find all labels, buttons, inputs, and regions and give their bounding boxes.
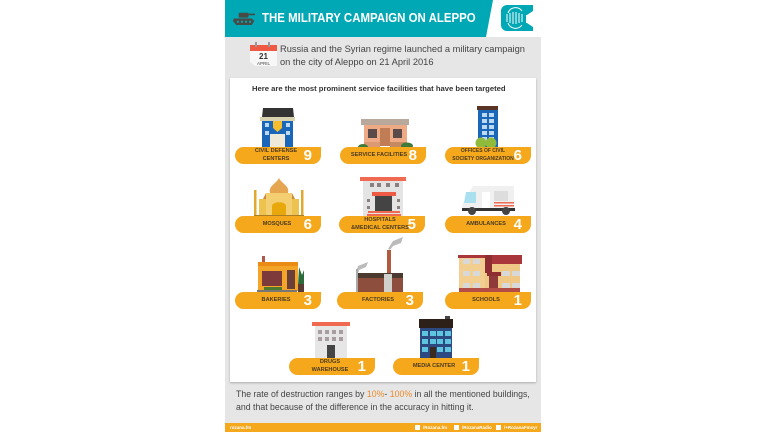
icon: calendar 21 April: 21 — [259, 52, 268, 61]
label: civil defense centers 9: CENTERS — [263, 156, 289, 162]
footer website: rozana.fm — [230, 425, 251, 430]
icon: factory — [356, 237, 403, 292]
footer social links: /+RozanaFmsyr — [504, 425, 537, 430]
card heading: Here are the most prominent service facilities that have been targeted — [252, 84, 506, 93]
intro text: Russia and the Syrian regime launched a military campaign — [280, 44, 525, 54]
label: ambulances 4: AMBULANCES — [466, 221, 506, 227]
label: civil society offices 6 — [445, 147, 531, 164]
label: mosques 6: 6 — [304, 216, 312, 233]
label: mosques 6: MOSQUES — [263, 221, 291, 227]
label: hospitals 5 — [339, 216, 425, 233]
icon: school — [458, 255, 522, 292]
footer social links: /RozanaRadio — [462, 425, 492, 430]
intro text — [280, 44, 525, 67]
label: bakeries 3: 3 — [304, 292, 312, 309]
label: hospitals 5: 5 — [408, 216, 416, 233]
label: civil society offices 6: SOCIETY ORGANIZATION — [452, 156, 514, 162]
label: media center 1: 1 — [462, 358, 470, 375]
label: ambulances 4 — [445, 216, 531, 233]
label: ambulances 4: 4 — [514, 216, 522, 233]
icon: hospital — [360, 177, 406, 216]
label: service facilities 8: 8 — [409, 147, 417, 164]
header banner — [225, 0, 541, 37]
closing text: and that because of the difference in the accuracy in hitting it. — [236, 402, 474, 412]
footer social links — [415, 425, 538, 430]
label: civil society offices 6: OFFICES OF CIVIL — [461, 148, 505, 154]
icon: civil society offices tower — [476, 106, 498, 147]
label: bakeries 3 — [235, 292, 321, 309]
label: factories 3: 3 — [406, 292, 414, 309]
label: hospitals 5: HOSPITALS — [364, 217, 396, 223]
label: media center 1 — [393, 358, 479, 375]
label: drugs warehouse 1: 1 — [358, 358, 366, 375]
label: media center 1: MEDIA CENTER — [413, 363, 455, 369]
label: drugs warehouse 1 — [289, 358, 375, 375]
label: bakeries 3: BAKERIES — [262, 297, 290, 303]
label: civil defense centers 9: CIVIL DEFENSE — [255, 148, 297, 154]
label: civil defense centers 9 — [235, 147, 321, 164]
label: drugs warehouse 1: DRUGS — [320, 359, 340, 365]
label: hospitals 5: &MEDICAL CENTERS — [351, 224, 409, 230]
label: schools 1: SCHOOLS — [472, 297, 500, 303]
label: civil defense centers 9: 9 — [304, 147, 312, 164]
closing text — [236, 389, 530, 412]
icon: mosque — [254, 178, 304, 216]
label: schools 1: 1 — [514, 292, 522, 309]
footer bar — [225, 423, 541, 432]
label: schools 1 — [445, 292, 531, 309]
icon: drugs warehouse — [312, 322, 350, 358]
icon: ambulance — [462, 186, 515, 215]
icon: calendar 21 April: APRIL — [257, 61, 270, 66]
label: mosques 6 — [235, 216, 321, 233]
page background panel — [225, 37, 541, 423]
closing text: The rate of destruction ranges by 10%- 100% in all the mentioned buildings, — [236, 389, 530, 399]
label: factories 3: FACTORIES — [362, 297, 394, 303]
icon: service facility house — [358, 119, 413, 147]
footer social links: /Rozana.fm — [423, 425, 447, 430]
panel: facilities card — [230, 78, 536, 382]
icon: bakery — [257, 256, 304, 292]
icon: calendar 21 April — [250, 42, 277, 66]
icon: media center — [419, 316, 453, 358]
icon: civil defense building — [260, 108, 295, 147]
label: service facilities 8 — [340, 147, 426, 164]
label: service facilities 8: SERVICE FACILITIES — [351, 152, 407, 158]
label: drugs warehouse 1: WAREHOUSE — [312, 366, 348, 372]
label: civil society offices 6: 6 — [514, 147, 522, 164]
label: factories 3 — [337, 292, 423, 309]
title: THE MILITARY CAMPAIGN ON ALEPPO — [262, 11, 476, 25]
intro text: on the city of Aleppo on 21 April 2016 — [280, 57, 434, 67]
icon: logo — [501, 5, 533, 31]
icon: tank — [233, 12, 255, 25]
